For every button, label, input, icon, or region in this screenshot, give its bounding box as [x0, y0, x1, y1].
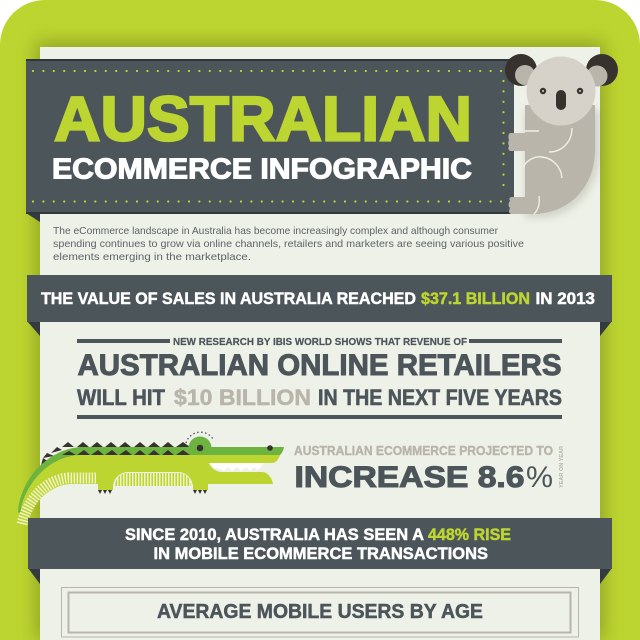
- dotted border: [33, 71, 505, 202]
- croc top scutes: [40, 442, 190, 469]
- croc back scutes: [62, 450, 190, 455]
- koala body lines: [523, 128, 572, 214]
- research block: [77, 337, 562, 419]
- research headline: AUSTRALIAN ONLINE RETAILERS: [78, 349, 562, 382]
- crocodile: [18, 432, 284, 526]
- research subhead: [77, 385, 562, 410]
- croc upper jaw: [195, 447, 284, 456]
- age section heading: [62, 588, 578, 637]
- croc tail stripes: [22, 478, 96, 524]
- research subhead: $10 BILLION: [174, 385, 311, 410]
- koala right ear: [586, 54, 618, 86]
- research kicker: NEW RESEARCH BY IBIS WORLD SHOWS THAT REVENUE OF: [173, 337, 467, 348]
- stat kicker: AUSTRALIAN ECOMMERCE PROJECTED TO: [294, 444, 553, 458]
- subtitle: ECOMMERCE INFOGRAPHIC: [52, 154, 472, 186]
- koala shadow: [525, 110, 600, 218]
- croc teeth: [209, 463, 264, 471]
- year on year note: YEAR ON YEAR: [559, 446, 565, 488]
- age section heading: AVERAGE MOBILE USERS BY AGE: [157, 601, 483, 623]
- croc eyes: [197, 445, 273, 451]
- intro paragraph: spending continues to grow via online channels, retailers and marketers are seeing various positive: [53, 238, 524, 250]
- intro paragraph: elements emerging in the marketplace.: [53, 251, 251, 263]
- sales banner: [27, 275, 612, 336]
- sales banner: $37.1 BILLION: [421, 289, 530, 308]
- croc body and tail: [20, 455, 280, 526]
- croc head bump: [188, 436, 212, 460]
- croc head spots: [186, 432, 213, 443]
- croc claws: [98, 490, 207, 494]
- stat value: INCREASE 8.6: [294, 461, 524, 494]
- stat percent sign: %: [526, 461, 553, 494]
- croc back and tail: [18, 447, 196, 516]
- koala foot: [508, 197, 540, 214]
- sales banner: THE VALUE OF SALES IN AUSTRALIA REACHED: [41, 289, 416, 308]
- koala nose: [556, 90, 566, 110]
- mobile banner: 448% RISE: [428, 525, 511, 544]
- research subhead: WILL HIT: [77, 385, 165, 410]
- koala body: [525, 105, 595, 214]
- mobile banner: [28, 518, 612, 584]
- mobile banner: IN MOBILE ECOMMERCE TRANSACTIONS: [154, 544, 488, 563]
- koala left ear: [505, 54, 537, 86]
- sales banner: IN 2013: [536, 289, 595, 308]
- title banner: [26, 59, 514, 222]
- growth stat: [294, 444, 565, 494]
- koala eyes: [540, 88, 583, 94]
- koala head: [526, 56, 596, 126]
- croc belly stripes: [115, 473, 191, 486]
- intro paragraph: [53, 225, 524, 263]
- research subhead: IN THE NEXT FIVE YEARS: [318, 385, 562, 410]
- mobile banner: SINCE 2010, AUSTRALIA HAS SEEN A: [125, 525, 424, 544]
- koala arm: [508, 133, 549, 151]
- koala: [505, 54, 618, 214]
- intro paragraph: The eCommerce landscape in Australia has become increasingly complex and although consumer: [53, 225, 498, 237]
- title: Australian: AUSTRALIAN: [54, 84, 472, 154]
